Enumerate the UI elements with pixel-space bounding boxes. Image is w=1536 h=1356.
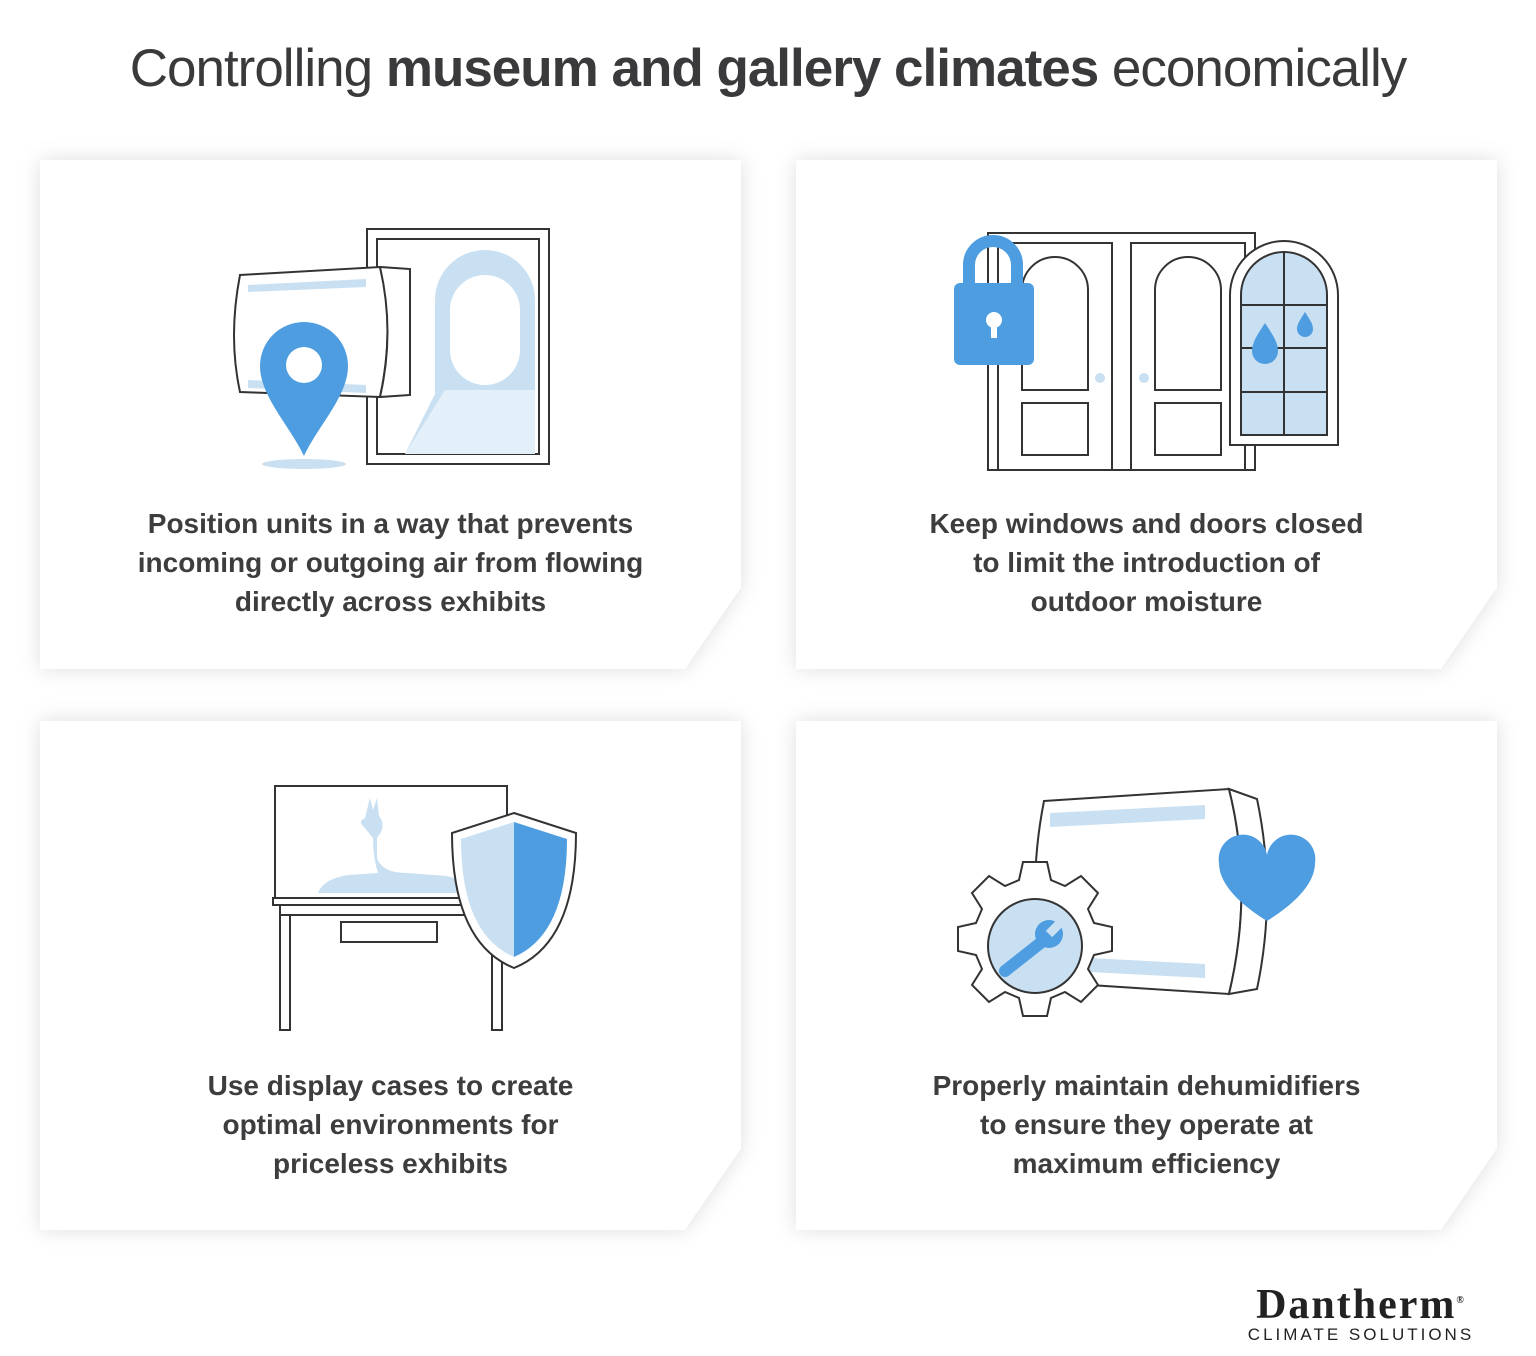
text: Position units in a way that prevents (148, 508, 633, 539)
logo: Dantherm: CLIMATE SOLUTIONS (1248, 1325, 1474, 1344)
panel: display cases (34, 714, 748, 1236)
icon: unit, pin and painting (233, 228, 550, 469)
text (138, 508, 643, 617)
text: maximum efficiency (1013, 1148, 1280, 1179)
logo: Dantherm: Dantherm® (1256, 1282, 1466, 1328)
icon: doors, lock, window (954, 232, 1339, 471)
panel: position units (34, 154, 748, 676)
text: Properly maintain dehumidifiers (933, 1070, 1360, 1101)
text: priceless exhibits (273, 1148, 508, 1179)
text: to ensure they operate at (980, 1109, 1313, 1140)
icon: unit, gear, heart (957, 787, 1316, 1017)
icon: display case with shield (272, 785, 577, 1031)
text: Use display cases to create (208, 1070, 573, 1101)
title: Controlling museum and gallery climates economically (130, 39, 1406, 98)
text: incoming or outgoing air from flowing (138, 547, 643, 578)
text (929, 508, 1364, 617)
panel: windows and doors (790, 154, 1504, 676)
text (933, 1070, 1360, 1179)
logo: Dantherm (1248, 1282, 1474, 1344)
panel: maintain dehumidifiers (790, 714, 1504, 1236)
text: Keep windows and doors closed (929, 508, 1364, 539)
text: outdoor moisture (1031, 586, 1262, 617)
text: optimal environments for (222, 1109, 559, 1140)
text (208, 1070, 573, 1179)
text: to limit the introduction of (973, 547, 1320, 578)
text: directly across exhibits (235, 586, 546, 617)
